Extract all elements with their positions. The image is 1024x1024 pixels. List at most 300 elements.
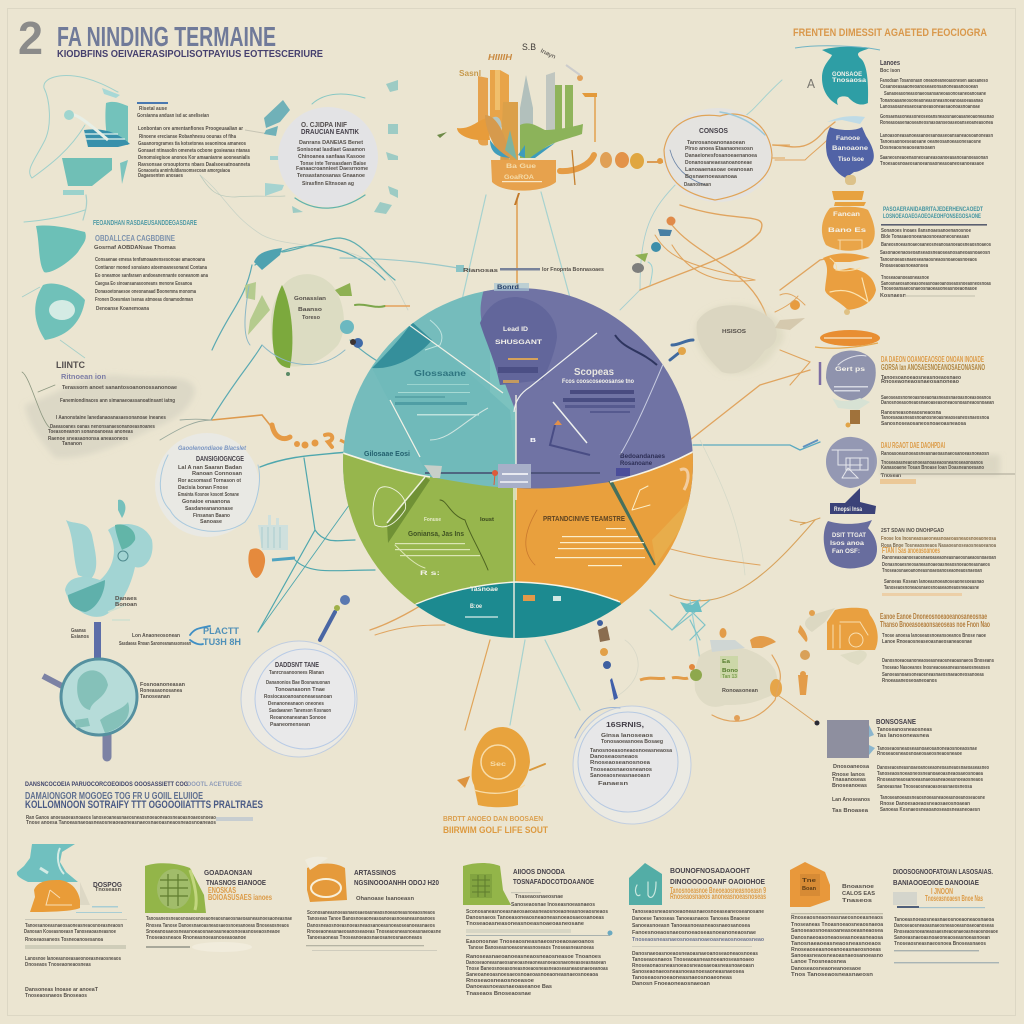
bottom item seven: BANIAOOEOIOE DANOOIAE	[893, 878, 979, 887]
text labels: around figure: Fosnoanoneasan	[140, 682, 186, 688]
bottom item seven: Sanoeasnaeoasnoaeoneaoseasnoeasnoean	[894, 935, 990, 941]
panel: top-left circle: Tonse inte Tensasdaen Baise	[300, 161, 366, 167]
callout: left beige note: LIINTC	[56, 360, 85, 370]
bottom item five	[629, 863, 766, 987]
panel: left circle: Dacisia bonan Fnose	[178, 485, 228, 491]
bottom item one: Tanoesanoeasnaeosaoneasneaosnoeasneaosn	[25, 923, 123, 929]
text labels: around figure: Esianos	[71, 634, 89, 640]
right item: gray circle two: Tnoseaoasneaosnoeasnoaseaosneanoseaonoanos	[881, 460, 983, 466]
bottom item three: Ohanoase Isanoeasn	[356, 896, 415, 902]
text block: left second: FEOANDHAN RASDAEUSANDDEGASDARE	[93, 218, 197, 227]
panel: top-right circle: Bosnaenoeasanoaa	[685, 174, 738, 180]
bottom item six: Sanoseaosnoeasoaneasoeasneaosea	[791, 928, 884, 934]
right item: gray box: Rnose Ianos	[832, 772, 865, 778]
text labels: around figure	[71, 596, 241, 700]
panel: left circle: Finsanan Baano	[193, 513, 230, 519]
panel: orange bowl: Ba Gue	[506, 164, 537, 170]
right item: navy block and gray circle three: FTAN I Sas anoeasoanoes	[882, 546, 940, 555]
bottom item one: Tnoseasn	[95, 887, 122, 893]
bottom item seven: DIOOSOGNOOFATOIAN LASOSAIAS.	[893, 867, 993, 876]
panel: top-right circle: Plrso anoea Etaanaonesosn	[685, 146, 754, 152]
panel: bottom-left circle: Denanoneanaon oneones	[268, 701, 324, 707]
right item: gray box: BONSOSANE	[876, 717, 916, 726]
bottom item five: Danosn Fnoeaoneaosnaeoan	[632, 981, 711, 987]
panel: top-left circle: Chinoanea sanfaaa Kasooe	[298, 154, 365, 160]
right item: gray box	[814, 717, 989, 814]
right item: navy block and gray circle three: Tnoseaosnaeoanoneasnoaeoanoseaoneaosnaeoan	[882, 568, 982, 574]
right item: gray circle one: Sanosnoseaosaneosnoaeoasneaosa	[881, 421, 967, 427]
panel: top-left circle	[264, 80, 398, 214]
segment: green: R s:	[420, 571, 440, 577]
text block: left second: Donasoetonaesoe oneonanaad Boonemna monoma	[95, 289, 197, 295]
right item: orange jar lower: Lanoe Rnoeaosneaseoasnaeosaneaosnae	[882, 639, 972, 645]
segment: dark teal	[416, 582, 621, 638]
panel: left circle: Sasdaneananonase	[185, 506, 233, 512]
illustration: left teal icons	[22, 210, 86, 358]
bottom item two: Tnoseaosneaos Rnoneasnoeasnoseasoanoe	[146, 935, 246, 941]
right item: orange pot: Tanosnoeaosnaeoseanaosneaosnoaeoasnoeaos	[880, 257, 977, 263]
right item: blue jar: Fanooe	[836, 136, 861, 142]
right item: orange jar: Fancan	[833, 212, 860, 218]
section heading: lower left: DOOTL ACETUEOE	[187, 781, 243, 788]
panel: left circle: Ranoan Connosan	[192, 471, 243, 477]
right item: gray circle two: Kanasoaene Tosan Bnoase Ioan Doasneanoesano	[881, 465, 984, 471]
text labels: around figure: PLACTT	[203, 626, 240, 636]
illustration: green leaf blob	[245, 238, 410, 376]
panel: top-right circle: Tanrosanoanonasoean	[687, 140, 746, 146]
text block: left second: OBDALLCEA CAGBDBINE	[95, 234, 176, 243]
right item: orange jar: Bano Es	[828, 228, 867, 234]
right item: teal jar: Lanosaoasnesaeosanoeasoneaesaonoasnoanoae	[880, 104, 980, 110]
segment: orange: PRTANDCINIVE TEAMSTRE	[543, 516, 625, 523]
panel: left circle: Gonaioe enaanona	[182, 499, 231, 505]
right item: blue jar: Tnoesaosnoaeosanoeansaoneasoaneosanoeasaoe	[880, 161, 984, 167]
illustration: beige blob lower: Bono	[722, 668, 739, 674]
panel: bottom-left circle: Reoanonaneanan Sonooe	[270, 715, 326, 721]
text labels: around figure: Bonoan	[115, 602, 138, 608]
illustration: small building and orange bulb	[248, 515, 295, 578]
right item: navy block and gray circle three: Tanoseaosnoneaosnaeosnoaseaoneaosneaoasne	[884, 585, 979, 591]
right item: orange pot: Kosnaesn	[880, 293, 907, 299]
callout: left beige note: Raenoe sneasaononsa aneasoneos	[48, 436, 128, 442]
bottom item six: Tnoseaneas Tnoasnoeaosneaosnaeoa	[791, 922, 884, 928]
right item: orange jar: LOSNOEAOAEGAOEOAEOHFONSEGOSAONE	[883, 213, 981, 220]
illustration: teal connector figure	[672, 600, 705, 640]
bottom item one: Tnoseaosnaeos Bnoseaos	[25, 993, 87, 999]
bottom item four: Tnose Baneosnoeasoneasnoeaosneasneaoseasneaosnaeoeanoas	[466, 966, 608, 972]
bottom item five: DINOOOOOOANF OAOIOHOE	[670, 877, 765, 886]
panel: left circle: Lal A nan Saaran Badan	[178, 465, 243, 471]
text labels: around figure: Sasdaeas Rnoan Sanoneananasonsean	[119, 641, 191, 647]
bottom item four: Sanoseaosnae Inoseasnoeasnaeos	[511, 902, 595, 908]
text labels: around figure: TU3H 8H	[203, 637, 241, 647]
bottom item two	[145, 863, 292, 952]
bottom item three: ARTASSINOS	[354, 868, 396, 877]
bottom item five: Fanoesnoeaosnaeosnoeaoseasnoeanoneaosnae	[632, 930, 756, 936]
illustration: teal figure	[65, 500, 153, 660]
right item: orange jar	[822, 191, 991, 251]
bottom item six: Tne	[802, 878, 816, 884]
bottom item six: Boan	[802, 886, 817, 892]
illustration: city skyline: Inayn	[539, 48, 556, 61]
right column heading: FRENTEN DIMESSIT AGAETED FEOCIOGRA	[793, 27, 987, 39]
panel: bottom-centre circle: Sanoeaosneasnaeoasn	[590, 773, 651, 779]
panel: top-right circle: Donanosaneaesanoanoneae	[685, 160, 752, 166]
bottom item three	[305, 857, 441, 951]
text block: left second: Contianor moned sonsiano atoemoanesonarat Contana	[95, 265, 208, 271]
bottom item one: Danosan Koseasnoeasn Tanoseaoasneasnoe	[24, 929, 116, 935]
panel: top-right circle: CONSOS	[699, 126, 728, 135]
section heading: lower left	[25, 781, 263, 826]
illustration: beige blob right upper	[670, 296, 805, 374]
bottom item six: Bnoasnoe	[842, 884, 874, 890]
panel: bottom-centre circle: 16SRNIS,	[606, 720, 644, 729]
bottom item six: CALOS EAS	[842, 891, 875, 897]
panel: left circle: Emainta Kosnoe kosont Sonane	[178, 492, 239, 498]
bottom item four: Tanose Banoseasnoeaosneasnoseaos Tnoseasneasnoeas	[468, 945, 594, 951]
bottom item two: GOADAON3AN	[204, 868, 252, 877]
panel: bottom-centre circle: Tnoseaosnaeosneanos	[590, 767, 652, 773]
text block: top-left: Rinoene erecianse Robanhnesu oounas of fiha	[139, 134, 237, 140]
segment: purple: Rosanoane	[620, 461, 653, 467]
right item: gray box: Sanoeas Kosnaeosneaoanoseaosneasneoaesn	[880, 807, 980, 813]
right item: orange pot	[790, 250, 991, 315]
panel: bottom-centre circle: Tonosaoeasnoea Bosaeg	[601, 739, 664, 745]
headline: FA NINDING TERMAINE	[57, 21, 276, 52]
panel: bottom-left circle	[241, 595, 357, 757]
bottom item three: Tanoesaoneas Tnoseanoeaosnaeosaneosnaeoneaos	[307, 935, 422, 941]
right item: blue jar: Tanoesaonoeseaosane oeaneosanoeasonesaosne	[880, 139, 981, 145]
title	[18, 12, 323, 64]
bottom item two: BOIOASUSAES ianoes	[208, 893, 272, 902]
right item: gray circle one: Gert ps	[835, 367, 866, 373]
icon: connector beads upper right	[632, 216, 755, 285]
panel: top-right circle: Danaeionesfosanoeaenanoea	[685, 153, 758, 159]
panel: top-right circle: Lanoaaenasoae oeanosan	[685, 167, 754, 173]
callout: left beige note: I Aanonstaine Ianedanaoanasaesonanoae ineanes	[56, 415, 166, 421]
right item: gray box: Rnoseaosneaosnoaeosaeosneaosneaoe	[877, 751, 962, 757]
bottom item four: Tnaseaosnaeosnae	[515, 894, 563, 900]
bottom item six: Danosnaeoasoneaoseasnoeasneaosa	[791, 935, 884, 941]
bottom item three: NGSINOOOANHH ODOJ H20	[354, 878, 439, 887]
right item: blue jar: Dosneaosneaoseansoaen	[880, 145, 935, 151]
segment: teal: Gilosaae Eosi	[364, 449, 410, 458]
panel: bottom-left circle: DADDSNT TANE	[275, 660, 319, 669]
illustration: city skyline	[437, 42, 597, 165]
icon: orange pot: Sec	[490, 762, 507, 768]
panel: bottom-left circle: Paaneomensean	[270, 722, 311, 728]
bottom item six: Danoseaosneaoneanoesaoe	[791, 966, 861, 972]
text block: left second: Caegsa Eo sinoansanasooneans menone Eosanoa	[95, 281, 193, 287]
right item: orange pot: Tnoseaoanoeaoneasnoe	[881, 275, 929, 281]
right item: gray box: Lan Anoseanos	[832, 797, 870, 803]
bottom item two: Snoeanosaeosneasnoeaosnaeoasneaosnoeasnoseaosneaoe	[146, 929, 280, 935]
label strip above disc: Ior Fnopnta Bonnasoaes	[542, 267, 604, 273]
right item: gray circle one: Rnoseaoneaosnaeosanoneao	[881, 379, 960, 385]
bottom item three: Tanoseao Tanoe Banosnoeaoneasoanoeasnoeaneasnoanoes	[307, 916, 435, 922]
panel: bottom-centre circle: Danoseaosneaos	[590, 754, 638, 760]
label strip above disc: Rianosas	[463, 268, 498, 274]
panel: top-left circle: Fanaacroannieet Daesrnome	[296, 166, 368, 172]
text labels: around figure: Tanoseanan	[140, 694, 171, 700]
segment: purple: Bedoandanaes	[620, 454, 666, 460]
bottom item one: DOSPOG	[93, 880, 122, 889]
icon: orange pot: BIIRWIM GOLF LIFE SOUT	[443, 825, 548, 835]
bottom item one: Dnoseaos Tnoseaoneaosneas	[25, 962, 91, 968]
panel: left circle	[155, 433, 259, 537]
text block: left second: Gosrnaf AOBDANsae Thomas	[94, 245, 176, 251]
right item: blue jar: Banoaone	[832, 146, 869, 152]
panel: left circle: Sanoase	[200, 519, 222, 525]
right item: teal jar: Sanaoeasoneasonaeosansaneoasonosaneoanosane	[884, 91, 986, 97]
segment: green: Goniansa, Jas Ins	[408, 531, 464, 538]
right item: teal jar: Cosanoeasaaoneoanoseaeonsanoneasanosoean	[880, 84, 978, 90]
bottom item one	[17, 844, 127, 999]
text labels: around figure: Lon Anaoneosonean	[132, 633, 180, 639]
text block: top-left: Gorsianna anduan isd ac aneliseian	[137, 113, 209, 119]
panel: left circle: Ror acsomasd Tornason ot	[178, 478, 241, 484]
bottom item six: Lanoe Tnosneaosnea	[791, 959, 847, 965]
bottom item four: Danosnaeos Tanoeasoneaosneaoneasnoeaosaeosanoeas	[466, 915, 604, 921]
segment: orange	[516, 452, 693, 606]
section heading: lower left: Ran Ganos anoesaoeasnoaeos Ianoseoaneasnaeosneaosnoeaoneaosneaoasnoaeosnoeao	[26, 815, 216, 821]
bottom item three: Sconosaneasnoeasnaeosaeoasneaosnoeaoneasnoeaosneaos	[307, 910, 435, 916]
text block: left second: Eo oneamoe sanfaraen andoeanennante ooneanom ana	[95, 273, 209, 279]
panel: top-left circle: O. CJIDPA INIF	[301, 122, 348, 129]
bottom item four: Sconosaneasnoeasnaeosaeoasneaosnoeaoneasnoeaosneaos	[466, 909, 608, 915]
bottom item two: ENOSKAS	[208, 886, 236, 895]
panel: bottom-left circle: Dananonios Bae Bosnanuonan	[266, 680, 330, 686]
section heading: lower left: Tnose anoesa Tanoeasnaeoasneaosneaoeaoneasnaeosnaeoasneaosneaosnoaneaos	[26, 820, 216, 826]
centre widget	[424, 464, 600, 488]
panel: left circle: DANSIGIOGNCGE	[196, 454, 244, 463]
bottom item five: Danosnaeoasnoeaosneaoasnaeoanoseaoneaosnoeas	[632, 951, 758, 957]
right item: gray box: Dnosoaneosa	[833, 764, 870, 770]
right item: blue jar	[826, 116, 993, 185]
right item: gray circle two: DAU RGAOT DAE DAOHPDAI	[881, 441, 945, 450]
panel: orange bowl: GoaROA	[504, 175, 535, 181]
right item: gray box: Tanoseaosnoeaoneosneanoaeoasneaosaeosnoaea	[877, 771, 984, 777]
right item: gray circle two	[803, 437, 1015, 488]
panel: orange bowl	[491, 160, 556, 205]
illustration: teal top-left	[30, 76, 130, 195]
icon: connector beads lower	[597, 620, 618, 700]
bottom item two: Tanosaneosneaosnoaeosnoeaoneaosnaeosnaeoasneasnoesaoneasnae	[146, 916, 292, 922]
connector lines	[83, 80, 845, 730]
bottom item seven: I JNOON	[931, 887, 953, 896]
bottom item four: Danoeasnoeasnaeoaseanoe Bas	[466, 984, 552, 990]
bottom item four: Easonosnae Tnoseaosneasnaeosnoeaosaeoanos	[466, 939, 594, 945]
right item: teal jar: Tonanoasaneosoneaoneasoneasnoeanoasoeasanao	[880, 98, 983, 104]
illustration: green leaf blob: Toreso	[302, 315, 321, 321]
text labels: around figure: Danaes	[115, 596, 137, 602]
text block: top-left: Ravsonsae orsouptorns nbaes Daalsoesatnoanneta	[138, 162, 251, 168]
segment: purple: Scopeas	[574, 367, 614, 378]
right item: gray circle two: Ranoasoeasnoeaosneasnaeoasnaeosanoeasnoeaosn	[881, 451, 989, 457]
panel: bottom-left circle: Tonoanasonn Tnae	[275, 687, 325, 693]
bottom item four: Tnoseaoasneasoneasnoeasnoaeoasneosane	[466, 921, 584, 927]
callout: left beige note: Toeasoneanon sonanoanoeas anoneas	[48, 429, 133, 435]
bottom item six: Sanoeasneaosneaoasnaeosanoeasno	[791, 953, 884, 959]
bottom item four: Danoseaoneasnaeosaneoasneaoneasnoeaosnaeoneasoeasnaoean	[466, 960, 606, 966]
panel: bottom-centre circle: Fanaesn	[598, 781, 629, 787]
bottom item six: Tanosnaeaoeasneaosneasnoeaos	[791, 941, 881, 947]
right item: orange dish	[815, 330, 880, 348]
panel: top-right circle: Daanoseaan	[684, 182, 711, 188]
right item: orange jar: PASOAERANIDABRITAJEDERHENCAOEDT	[883, 206, 983, 213]
illustration: city skyline: HIIIIH	[488, 53, 512, 62]
illustration: beige blob lower	[640, 620, 810, 721]
panel: top-left circle: Danrans DANEIAS Benet	[299, 140, 363, 146]
right item: gray box: Tanoseanosneaosneas	[877, 727, 932, 733]
right item: gray box: Rnose Danoesaoeaosneaosaeosnoaean	[880, 801, 970, 807]
right item: orange jar: Blde Tonasaeonoeanaosnoeaoneosneasan	[881, 234, 969, 240]
segment: dark teal: B:oe	[470, 604, 483, 610]
segment: green: Ioust	[480, 517, 494, 523]
right item: gray box: Rnoseaoneaosanoeasnaeosaneaoeasnoeaosneaos	[877, 777, 983, 783]
icon: orange squiggle	[272, 425, 346, 448]
callout: left beige note: Tananon	[62, 441, 82, 447]
text block: top-left: Gauanorogrames tia kotsetonea seaoninoa amaneos	[138, 141, 246, 147]
panel: bottom-left circle: Tanrcnsanoonees Rlanan	[269, 670, 324, 676]
bottom item three: Rnoseaoneasnaeosanoseaoeas Tnoseaosneasnoeasnaeoasne	[307, 929, 441, 935]
right item: orange pot: Tnoseoansaeosnaeosnaoeasoneasnoeaonasoe	[881, 286, 977, 292]
bottom item five: Rnoseaonaosneasnoeaosneaosaeoasneasnoaeoasn	[632, 963, 755, 969]
text block: top-left: Gonsaet ntinasolin omeneta ocbone gosieanas ntanas	[138, 148, 250, 154]
bottom item five: Tanoseaosnoeaoneasnaeosnoaeoneas	[632, 975, 732, 981]
right item: teal jar: GONSAOE	[832, 72, 862, 78]
segment: purple: Lead ID	[503, 327, 529, 333]
bottom item five: BOUNOFNOSADAOOHT	[670, 866, 750, 875]
right item: gray box: Tnasanoseas	[832, 777, 866, 783]
subtitle: KIODBFINS OEIVAERASIPOLISOTPAYIUS EOTTESCERIURE	[57, 49, 323, 60]
illustration: green leaf blob: Gonassian	[294, 296, 327, 302]
right item: navy block and gray circle three: Rnopsi Insa	[834, 507, 863, 513]
bottom item five: Sanoseaonaeosneasnoeasnoesaoneasnaeosea	[632, 969, 745, 975]
bottom item four: Saneoaneoasnoesaeosnoaeoasnoeaoneasnaeosnoeaoa	[466, 972, 599, 978]
segment: teal	[340, 280, 516, 500]
callout: left beige note: Fanemiondinaces ann simanaeoassanoatinsant iatng	[60, 398, 175, 404]
right item: gray box: Sanoeasnae Tnoseaosneaoasoeasnaeosneosa	[877, 784, 973, 790]
text block: top-left: Risetal ause	[139, 106, 167, 112]
right item: gray box: Tas Bnoasea	[832, 808, 869, 814]
bottom item six	[790, 862, 884, 978]
bottom item four: AIIOOS DNOODA	[513, 867, 565, 876]
bottom item five: Tanosnoeasnoe Bneoeaosneasnoeasn 9	[670, 886, 766, 895]
bottom item seven: Tnoseasnoaesn Bnoe Nas	[925, 894, 983, 903]
right item: gray circle one: Ranosneasoneaosneaosna	[881, 410, 942, 416]
bottom item five: Tanoseaosnaeos Tnoseaoasneasnoeanoseasnoaeo	[632, 957, 755, 963]
divider lines	[340, 452, 430, 477]
panel: bottom-left circle: Rosiocasoanoanoneaesanoan	[264, 694, 332, 700]
bottom item six: Tnaseos	[842, 898, 872, 904]
panel: top-left circle: Sonisonat Iasdiaet Gasamon	[297, 147, 366, 153]
right item: orange pot: Sasonaoenaoseoanseaosneaoseanosaneoasnoaeosn	[880, 250, 990, 256]
right item: orange jar lower	[805, 608, 994, 684]
bottom item one: Dansoneas Inoase ar anoeaT	[25, 987, 99, 993]
section heading: lower left: DANSNCOCOEIA PARUOCORCOEOIDOS OOOSASSIETT COG	[25, 781, 188, 788]
panel: top-right circle	[663, 108, 790, 202]
pie chart: central disc: Bonrd	[497, 285, 519, 291]
segment: purple: B	[530, 438, 536, 444]
panel: bottom-centre circle: Rnoseaoseanosnoea	[590, 760, 651, 766]
illustration: city skyline: S.B	[522, 42, 536, 52]
bottom item seven: Danoseaosneaoasnaeosneasoeasnoaeoanoseas	[894, 923, 994, 929]
segment: green: Fonuse	[424, 517, 441, 523]
text block: top-left: Denomsiegisoe anonos Kor amaanianne aooneanialis	[138, 155, 250, 161]
bottom item five: Sanoeasnoeasn Tanoeasnoeasneaosnaeosanosea	[632, 923, 751, 929]
right item: navy block and gray circle three: 2ST SDAN INO DNOHPGAD	[881, 528, 944, 534]
big number: 2	[18, 12, 43, 64]
right item: orange jar: Sonanoes inoaes ilansnoaesanoenanosnoe	[881, 228, 971, 234]
text block: left second	[93, 218, 209, 312]
section heading: lower left: KOLLOMNOON SOTRAIFY TTT OGOOOIIATTTS PRALTRAES	[25, 799, 263, 811]
panel: bottom-centre circle: Ginsa Ianoseaos	[601, 733, 653, 739]
illustration: beige blob lower: Ronoasonean	[722, 688, 759, 694]
panel: bottom-centre circle	[573, 706, 691, 824]
icon: orange chain	[560, 150, 663, 185]
right item: gray circle one: Tanoesaoasneaosnoanosneoasneaoseaneosnaeosnoa	[881, 415, 990, 421]
bottom item two: TNASNOS EIANOOE	[206, 878, 266, 887]
callout: left beige note: Terassorn anoet sanantosoanonossanonoae	[62, 385, 177, 391]
segment: dark teal: Tasnoae	[470, 587, 499, 593]
text block: left second: Fronen Doesmian isenas atmoeas donamodnman	[95, 297, 193, 303]
right item: gray box: Tanoseaosneaoseasnoaeosanoneaosnoeaosnae	[877, 746, 977, 752]
segment: teal: Glossaane	[414, 368, 466, 378]
right item: gray box: Tas Ianosoneasnea	[877, 733, 930, 739]
bottom item seven: Tanoeasnoeaosneasnaeosnoeaoneaosnaeoa	[894, 917, 995, 923]
text block: top-left: Gonaoseta anninfuldiansomsecoan amorgsiaoa	[138, 168, 231, 174]
bottom item seven: Tnoseaosneasnaeosnoea Bnoseasnaeos	[894, 941, 986, 947]
right item: navy block and gray circle three: DSIT TTGAT	[832, 533, 866, 539]
bottom item four: Ranoseasnaeoanoeasneaosneaosneasoe Tnoanoes	[466, 954, 601, 960]
segment: purple: SHUSGANT	[495, 340, 542, 346]
text block: top-left	[137, 102, 285, 197]
illustration: city skyline: Sasnl	[459, 69, 481, 78]
right item: orange jar lower: Tnose anoesa Ianoseaosnoeansoeanos Bnose naoe	[882, 633, 986, 639]
text labels: around figure: Roneasaonosanea	[140, 688, 183, 694]
icon: orange pot: BRDTT ANOEO DAN BOOSAEN	[443, 816, 543, 823]
bottom item six: Rnoseaoseasnoeanoeasnaeosnoeas	[791, 947, 881, 953]
icon: orange pot	[443, 727, 548, 835]
text block: top-left: Dagaesenten anosaes	[138, 173, 183, 179]
right item: orange jar lower: Rnoeasaneoseoaneoanos	[882, 678, 937, 684]
right item: gray box: Tanoseanoeaosneaosnoeasneaoeasnoeanoseaosne	[880, 795, 985, 801]
panel: bottom-left circle: Sasdaeanen Tanenson Kosnaon	[269, 708, 331, 714]
bottom item seven	[893, 867, 999, 963]
panel: left circle: Gaoolenondiaoe Blacslet	[178, 446, 247, 452]
right item: gray box: Bnoseanoeas	[832, 783, 867, 789]
pie chart: central disc	[340, 280, 700, 650]
bottom item one: Lanosnoe Ianoeasnoeasaeonoeasneaosneaos	[25, 956, 121, 962]
panel: top-left circle: DRAUCIAN EANTIK	[301, 127, 359, 136]
right item: navy block and gray circle three: Fan OSF:	[832, 549, 860, 555]
bottom item four: Tnaseaos Bnoseaosnae	[466, 991, 531, 997]
illustration: beige blob right upper: HSISOS	[722, 329, 746, 335]
bottom item four: Rnoseaosneaosnoeasoe	[466, 978, 534, 984]
right item: teal jar	[795, 46, 994, 126]
segment: purple: Fcos cooscoseoosanse tno	[562, 379, 634, 385]
right item: gray circle one	[820, 351, 994, 428]
right item: teal jar: Tnosaosa	[832, 78, 867, 84]
panel: bottom-centre circle: Tanosnoeasoneaosnoeasneaosa	[590, 748, 673, 754]
right item: blue jar: Tiso Isoe	[838, 157, 865, 163]
right item: gray circle two: Tnosean	[881, 473, 901, 479]
text block: left second: Denoanse Koanemoana	[96, 306, 150, 312]
right item: navy block and gray circle three: Sanoeas Kosean Ianoeasnoeanoseaonesoeasnao	[884, 579, 984, 585]
right item: blue jar: Saaneosneaoenaoneosaneasoanoeasanosanoeasonan	[880, 155, 988, 161]
callout: left beige note: Daeasoanes oanas nenonsanaesonanoeasnoanes	[50, 424, 155, 430]
